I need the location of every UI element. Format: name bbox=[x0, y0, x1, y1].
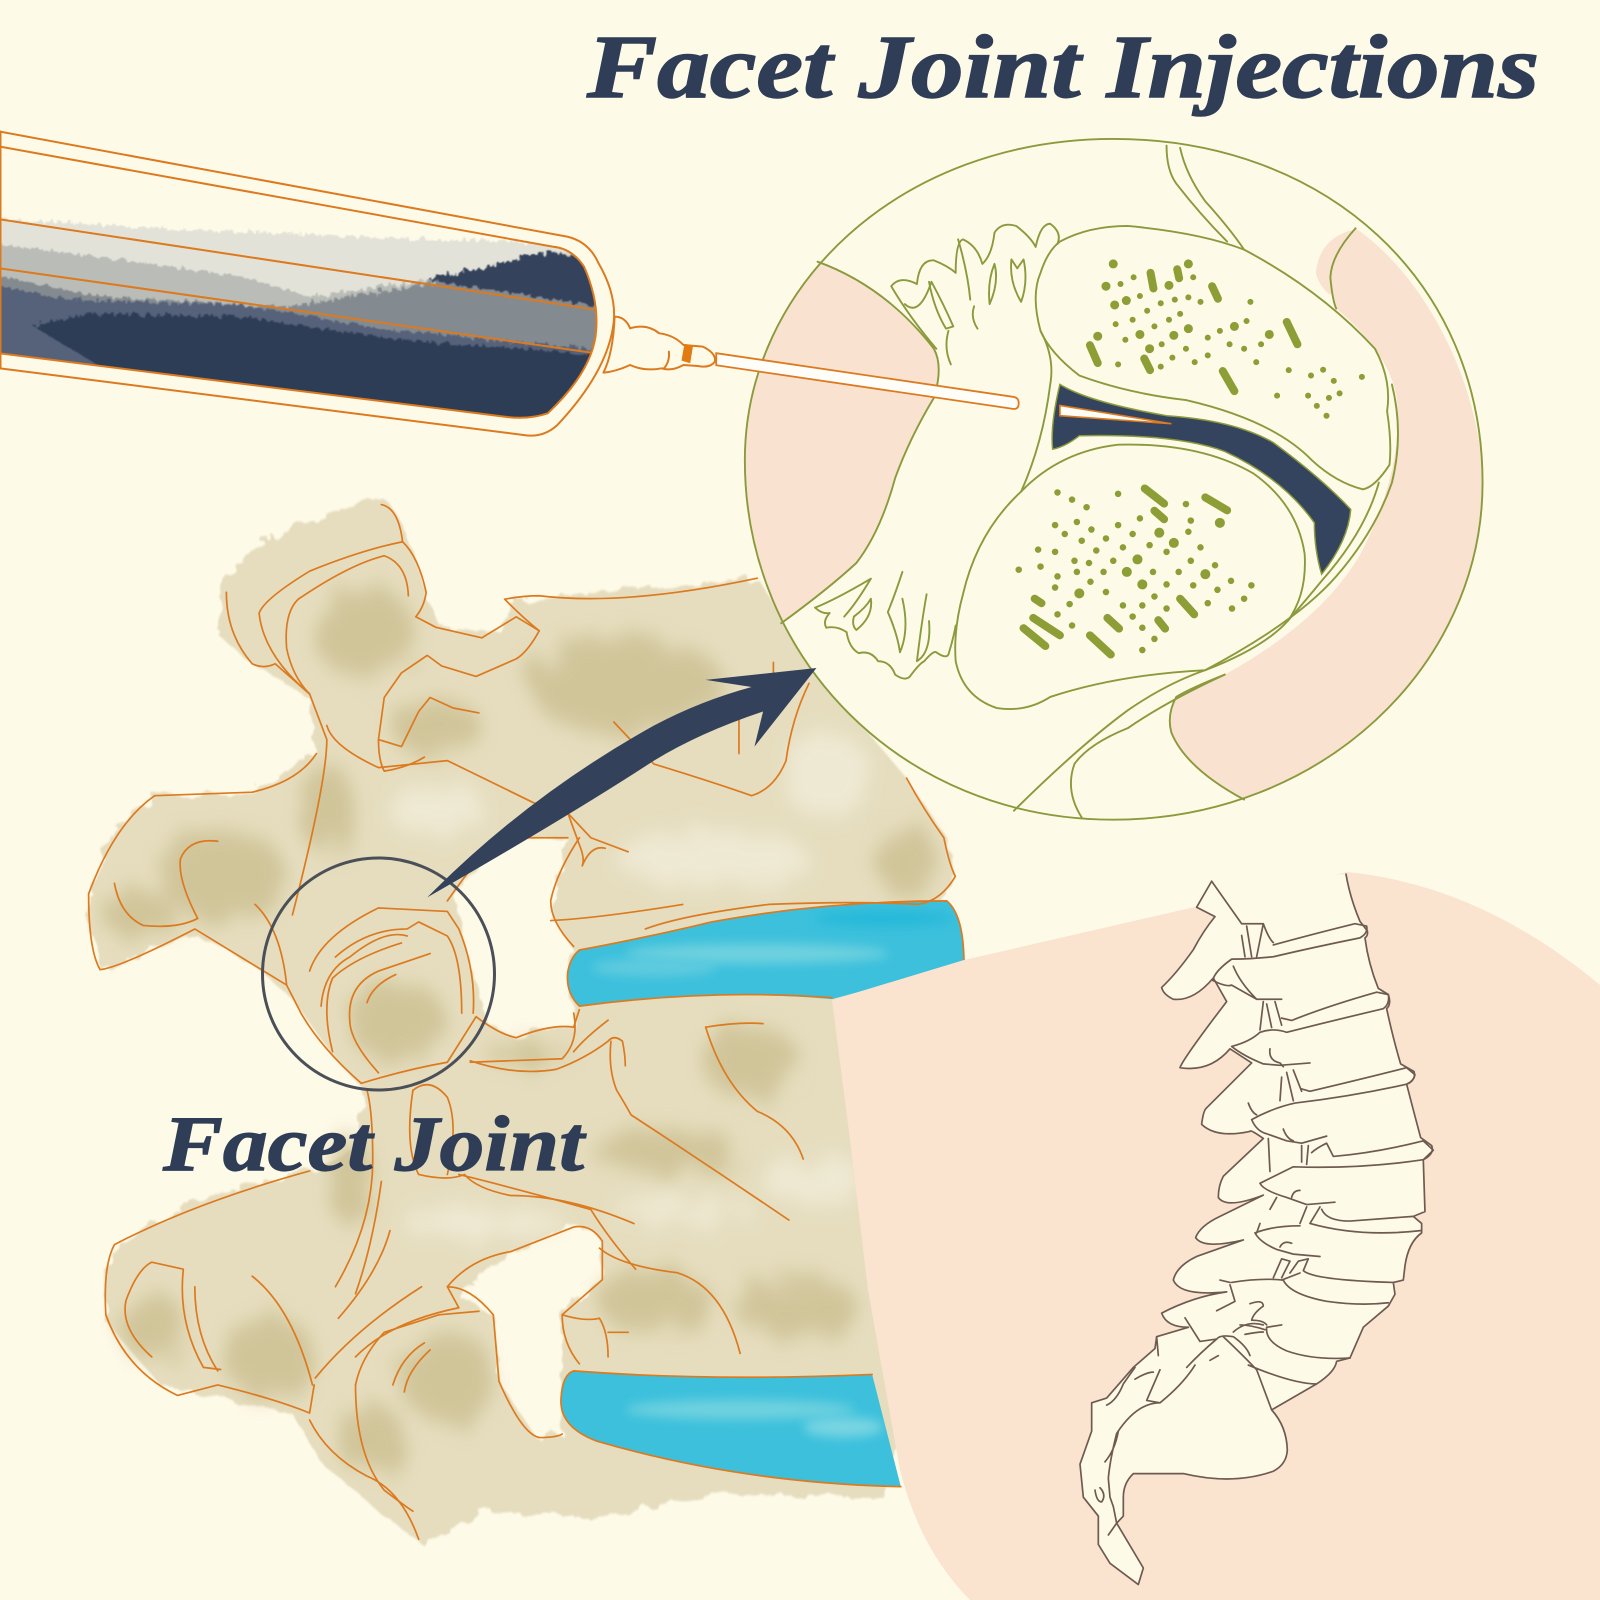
spine internal lines bbox=[1095, 881, 1433, 1535]
lower ligament fringe bbox=[815, 572, 956, 679]
soft tissue peach areas bbox=[745, 228, 1483, 800]
bone trabeculae upper bbox=[1019, 264, 1362, 655]
arrow from facet joint to magnified view bbox=[427, 668, 816, 897]
facet joint highlight circle bbox=[262, 858, 494, 1090]
joint outlines bbox=[781, 146, 1398, 817]
syringe barrel outlines bbox=[0, 132, 614, 436]
syringe nozzle bbox=[603, 317, 715, 373]
lower intervertebral disc bbox=[562, 1372, 901, 1486]
body silhouette bbox=[832, 872, 1600, 1600]
syringe fluid bbox=[0, 218, 601, 427]
label: Facet Joint: Facet Joint bbox=[162, 1100, 587, 1187]
bone watercolor wash bbox=[87, 498, 964, 1546]
needle bbox=[716, 353, 1019, 409]
magnifier disc bbox=[745, 139, 1483, 820]
needle tip inside joint bbox=[1060, 405, 1171, 424]
title: Facet Joint Injections bbox=[586, 18, 1539, 117]
spine silhouette bbox=[1080, 874, 1432, 1585]
peach wash outside lens bbox=[1316, 229, 1356, 295]
upper ligament fringe bbox=[891, 224, 1059, 364]
vertebrae illustration bbox=[87, 498, 970, 1546]
magnifier outline bbox=[745, 139, 1483, 820]
bone outlines bbox=[89, 505, 964, 1539]
bone trabeculae lower bbox=[1024, 488, 1227, 655]
synovial fluid in joint space bbox=[1052, 384, 1351, 574]
small spine illustration bbox=[1080, 874, 1433, 1585]
magnified facet joint bbox=[716, 139, 1483, 820]
syringe bbox=[0, 132, 715, 436]
upper intervertebral disc bbox=[568, 902, 964, 1006]
